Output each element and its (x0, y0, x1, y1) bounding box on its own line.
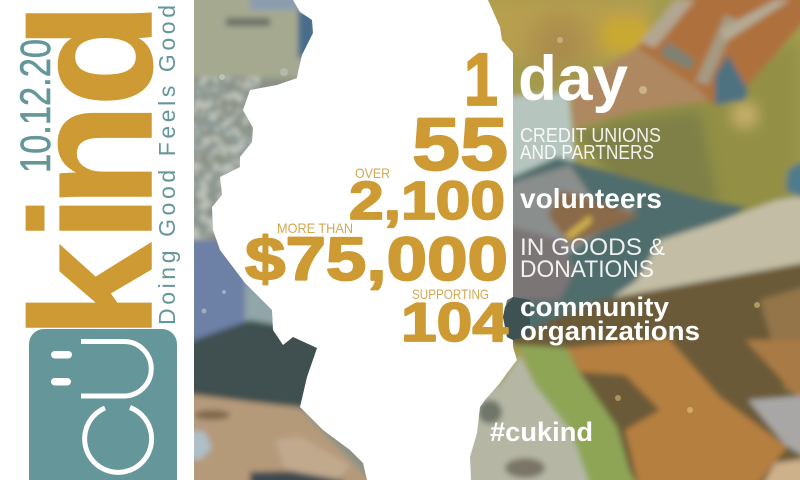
stat: supporting 104 organizations (401, 286, 700, 353)
stat: 55 credit unions: AND PARTNERS (520, 142, 654, 164)
letter U (81, 342, 151, 396)
stat: over 2,100 volunteers: 2,100 (349, 171, 505, 231)
stat: 1 day: day (518, 44, 628, 114)
torn white centre (212, 0, 517, 480)
letter C (85, 408, 152, 472)
photo: right torn panel (460, 0, 800, 480)
stat: more than $75,000: DONATIONS (520, 256, 654, 283)
stat: more than $75,000: $75,000 (245, 225, 508, 293)
stat: more than $75,000: IN GOODS & (520, 234, 665, 261)
logo badge: CU (29, 329, 177, 480)
photo: left torn panel (194, 0, 367, 480)
stat: supporting 104 organizations: SUPPORTING (412, 286, 489, 302)
stat: over 2,100 volunteers: OVER (355, 165, 390, 181)
stat: 55 credit unions: 55 (412, 103, 508, 186)
stat: 55 credit unions: CREDIT UNIONS (520, 125, 661, 147)
dots (51, 351, 72, 386)
logo wordmark: kind: kind (0, 2, 188, 339)
stat: over 2,100 volunteers: volunteers (520, 183, 662, 214)
stat: supporting 104 organizations: organizations (520, 316, 700, 346)
stat: more than $75,000 (245, 220, 665, 293)
hashtag: #cukind (490, 417, 593, 447)
stat: 1 day (464, 38, 628, 121)
stat: supporting 104 organizations: community (520, 292, 669, 322)
stat: over 2,100 volunteers (349, 165, 662, 231)
tagline: Doing Good Feels Good (154, 5, 180, 325)
stat: 55 credit unions (412, 103, 661, 186)
stat: 1 day: 1 (464, 38, 498, 121)
date: 10.12.20 (12, 39, 60, 173)
stat: supporting 104 organizations: 104 (401, 291, 508, 353)
stat: more than $75,000: MORE THAN (277, 220, 353, 236)
